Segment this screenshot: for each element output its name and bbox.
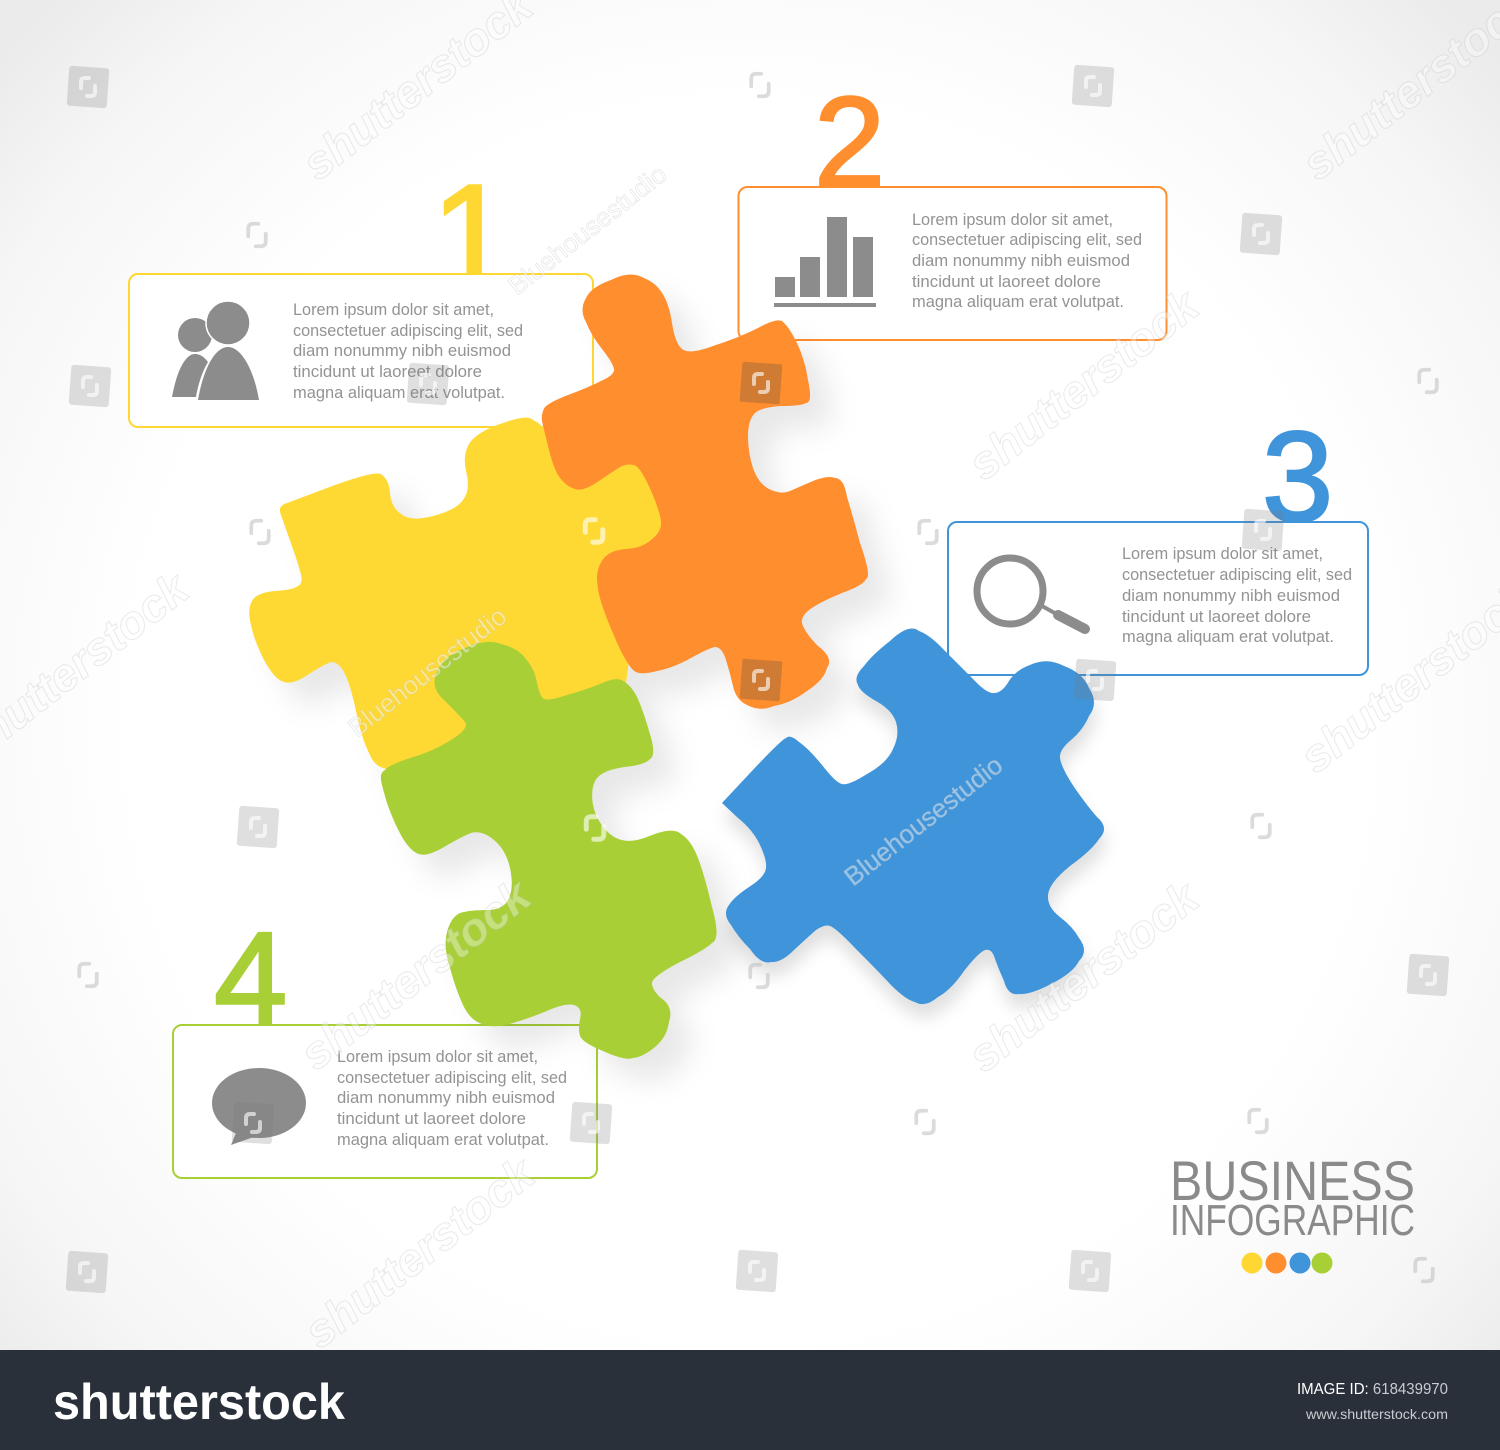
- watermark: diagonal text: Bluehousestudio: [838, 750, 1008, 892]
- panel: step 4: [173, 905, 597, 1178]
- text block 3: Lorem ipsum dolor sit amet,: [1122, 545, 1323, 563]
- brand title: [1170, 1149, 1415, 1245]
- puzzle piece: orange: [542, 274, 868, 709]
- panel: step 3: [948, 406, 1368, 675]
- text block 4: Lorem ipsum dolor sit amet,: [337, 1048, 538, 1066]
- panel: step 2: [738, 71, 1166, 340]
- icon: speech bubble: [212, 1068, 306, 1145]
- footer logo: shutterstock: [53, 1374, 345, 1430]
- text block 2: [912, 211, 1142, 311]
- heading: business: BUSINESS: [1170, 1149, 1415, 1212]
- panel frame 4: [173, 1025, 597, 1178]
- text block 4: magna aliquam erat volutpat.: [337, 1131, 549, 1149]
- number 4: 4: [214, 905, 287, 1052]
- text block 2: tincidunt ut laoreet dolore: [912, 273, 1101, 291]
- text block 1: magna aliquam erat volutpat.: [293, 384, 505, 402]
- watermark: diagonal text: Bluehousestudio: [342, 601, 512, 743]
- icon: magnifier: [977, 558, 1085, 629]
- puzzle piece: yellow: [249, 418, 690, 790]
- puzzle piece: blue: [722, 629, 1104, 1004]
- footer bar: [0, 1350, 1500, 1450]
- text block 4: consectetuer adipiscing elit, sed: [337, 1069, 567, 1087]
- text block 1: consectetuer adipiscing elit, sed: [293, 322, 523, 340]
- heading: infographic: INFOGRAPHIC: [1170, 1196, 1415, 1245]
- text block 3: diam nonummy nibh euismod: [1122, 587, 1340, 605]
- panel frame 3: [948, 522, 1368, 675]
- text block 1: diam nonummy nibh euismod: [293, 342, 511, 360]
- watermark: diagonal text: Bluehousestudio: [502, 159, 672, 301]
- watermark: diagonal text: shutterstock: [294, 1145, 546, 1358]
- icon: people: [172, 301, 259, 400]
- text block 4: diam nonummy nibh euismod: [337, 1089, 555, 1107]
- panel frame 1: [129, 274, 593, 427]
- watermark: diagonal text: shutterstock: [958, 869, 1210, 1082]
- text block 4: [337, 1048, 567, 1149]
- watermark: tiles: [66, 65, 1449, 1293]
- panel frame 2: [738, 187, 1166, 340]
- text block 1: [293, 301, 523, 402]
- colour dots: [1242, 1252, 1332, 1274]
- text block 2: Lorem ipsum dolor sit amet,: [912, 211, 1113, 229]
- icon: bar chart: [774, 217, 876, 307]
- watermark: diagonal text: shutterstock: [958, 277, 1210, 490]
- number 2: 2: [814, 71, 885, 214]
- website: www.shutterstock.com: [1305, 1406, 1448, 1422]
- watermark: diagonal text: shutterstock: [290, 867, 542, 1080]
- text block 1: Lorem ipsum dolor sit amet,: [293, 301, 494, 319]
- text block 2: diam nonummy nibh euismod: [912, 252, 1130, 270]
- text block 2: magna aliquam erat volutpat.: [912, 293, 1124, 311]
- puzzle piece: green: [381, 642, 716, 1059]
- image id: IMAGE ID: 618439970: [1297, 1381, 1448, 1398]
- text block 3: tincidunt ut laoreet dolore: [1122, 608, 1311, 626]
- text block 2: consectetuer adipiscing elit, sed: [912, 231, 1142, 249]
- text block 3: consectetuer adipiscing elit, sed: [1122, 566, 1352, 584]
- text block 3: magna aliquam erat volutpat.: [1122, 628, 1334, 646]
- text block 4: tincidunt ut laoreet dolore: [337, 1110, 526, 1128]
- panel: step 1: [129, 154, 593, 427]
- number 3: 3: [1262, 406, 1333, 549]
- puzzle cluster: yellow, orange, green: [249, 274, 868, 1059]
- text block 1: tincidunt ut laoreet dolore: [293, 363, 482, 381]
- number 1: 1: [431, 154, 512, 317]
- text block 3: [1122, 545, 1352, 646]
